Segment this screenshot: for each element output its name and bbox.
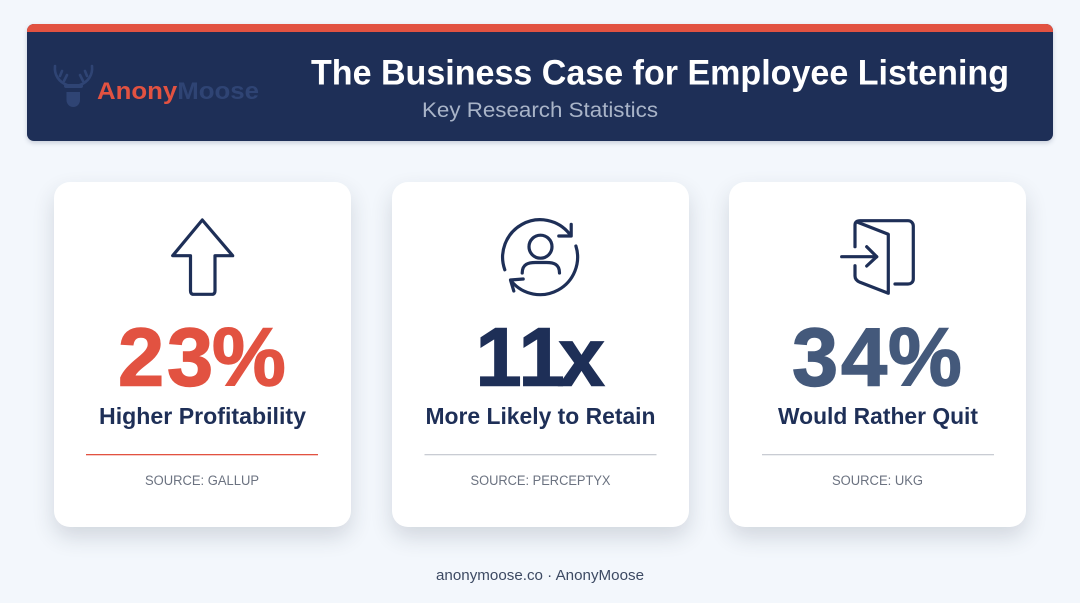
red top bar [27,24,1053,32]
icon: door with arrow [842,221,913,293]
logo wordmark: AnonyMoose [97,78,259,105]
title: The Business Case for Employee Listening [311,54,1009,92]
panel: more likely to retain [392,182,688,527]
footer: anonymoose.co · AnonyMoose [436,568,644,584]
stat: 11x: 11x [475,310,604,404]
label: Higher Profitability [99,403,306,429]
icon: up arrow [173,220,233,294]
source: SOURCE: PERCEPTYX [470,473,610,488]
logo: moose icon [55,66,92,107]
panel: would rather quit [729,182,1026,527]
stat: 34%: 34% [792,310,962,404]
panel: higher profitability [54,182,351,527]
source: SOURCE: GALLUP [145,473,259,488]
header banner [27,24,1053,141]
source: SOURCE: UKG [832,473,923,488]
label: Would Rather Quit [778,403,978,429]
icon: person with rotating arrows [502,220,577,295]
label: More Likely to Retain [425,403,655,429]
stat: 23%: 23% [118,310,286,404]
subtitle: Key Research Statistics [422,98,658,122]
